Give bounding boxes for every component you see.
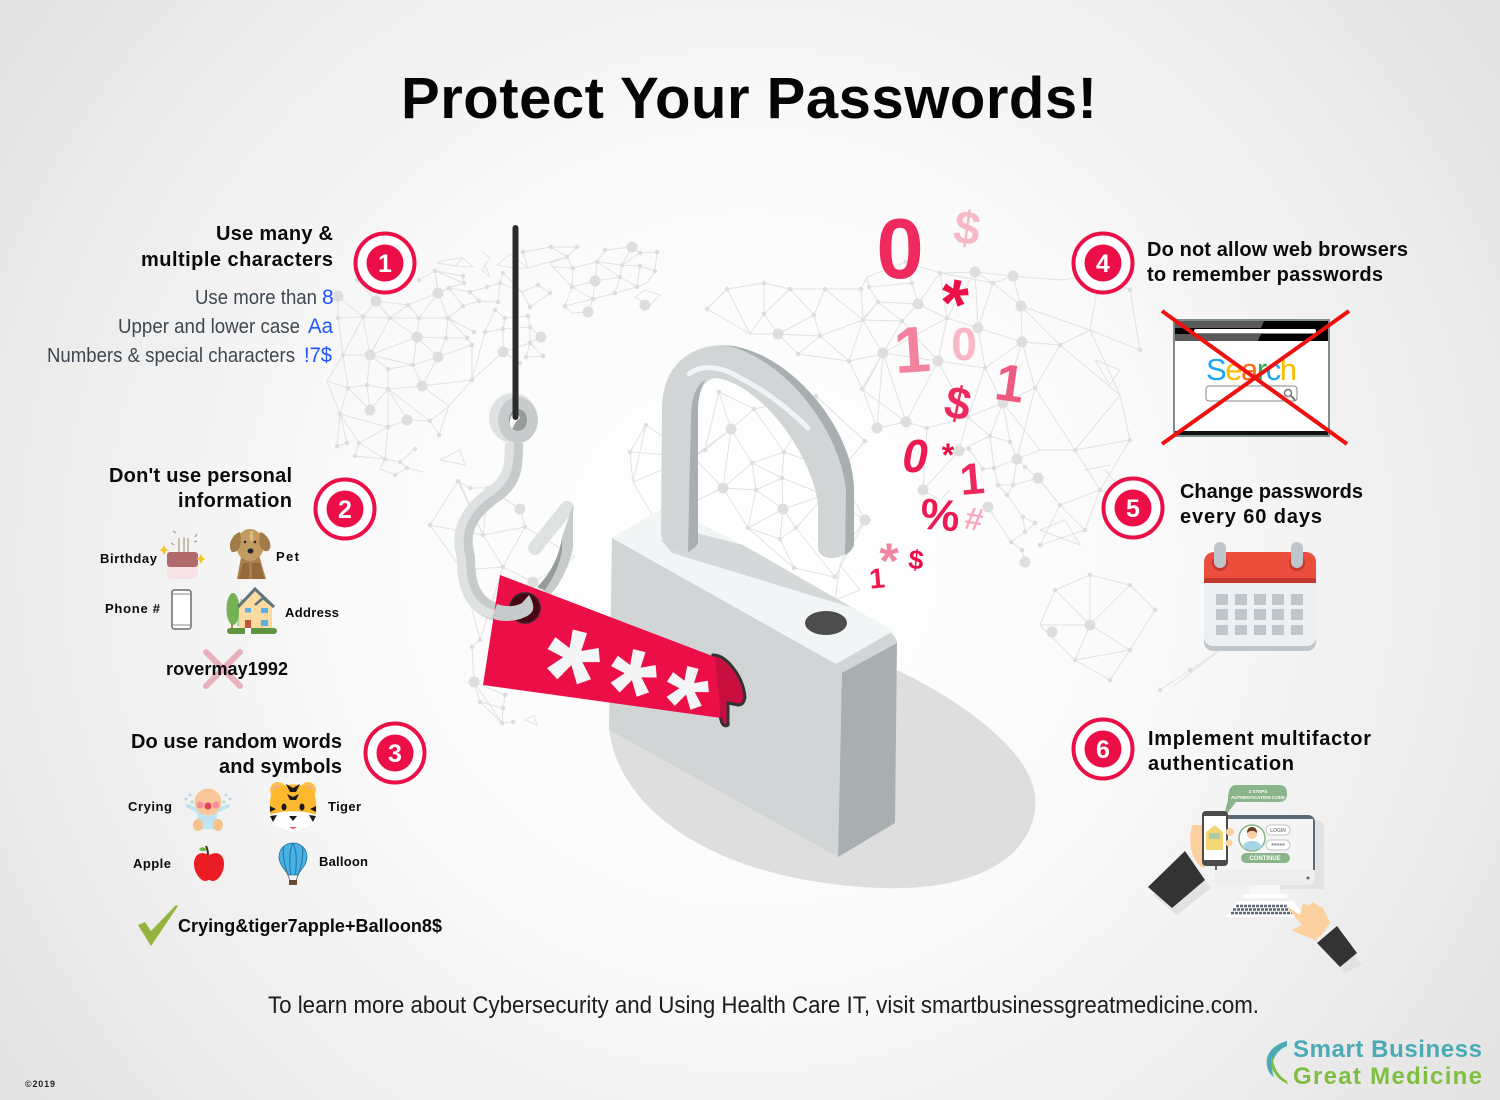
badge 4: [1074, 234, 1132, 292]
badge 6: 6: [1096, 736, 1110, 764]
left hand with phone: [1148, 811, 1234, 908]
badge 4: 4: [1096, 250, 1110, 278]
tip 5 heading: [1180, 481, 1363, 528]
tip 1 details: Upper and lower case: [118, 316, 300, 338]
label pet: Pet: [276, 549, 300, 564]
avatar: [1239, 825, 1265, 851]
icon: calendar: [1204, 542, 1316, 651]
icon: tiger: [270, 782, 316, 833]
panel: tip 4 browsers: [1074, 234, 1408, 444]
padlock: [609, 345, 897, 857]
floating password characters: 1: [891, 312, 933, 387]
label apple: Apple: [133, 856, 171, 871]
login fields: *****: [1271, 843, 1285, 850]
strong password with check mark: [138, 905, 442, 946]
padlock bevel: [836, 633, 897, 673]
label crying: Crying: [128, 799, 172, 814]
panel: tip 3 random words: [128, 724, 442, 946]
tip 3 heading: [131, 731, 342, 778]
tip 2 heading: [109, 465, 292, 512]
floating password characters: 1: [992, 353, 1028, 415]
login fields: LOGIN: [1270, 828, 1286, 834]
floating password characters: 1: [868, 562, 886, 595]
padlock right face: [838, 642, 897, 857]
floating password characters: [868, 199, 1028, 595]
floating password characters: 0: [951, 318, 977, 370]
panel: tip 5 change passwords: [1104, 478, 1363, 651]
tip 5 heading: every 60 days: [1180, 506, 1322, 528]
icon: phone: [172, 590, 191, 629]
world network map: [327, 247, 1220, 725]
padlock top face: [612, 512, 896, 670]
password asterisks: *: [589, 620, 669, 763]
chat bubble: 2 STEPS: [1249, 789, 1267, 794]
tip 3 heading: and symbols: [219, 756, 342, 778]
illustration: multifactor login: [1148, 785, 1362, 973]
tip 1 heading: [141, 223, 333, 271]
label phone: Phone #: [105, 601, 161, 616]
title: Protect Your Passwords!: [401, 66, 1097, 131]
floating password characters: #: [962, 500, 986, 538]
panel: tip 2 personal information: [100, 465, 374, 686]
logo: [1267, 1036, 1482, 1090]
password asterisks: [523, 595, 720, 771]
label birthday: Birthday: [100, 551, 158, 566]
tip 4 heading: [1147, 239, 1408, 286]
badge 1: 1: [378, 250, 392, 278]
icon: cake: [159, 531, 206, 579]
tip 1 heading: multiple characters: [141, 249, 333, 271]
padlock shadow: [609, 670, 1035, 888]
tip 1 heading: Use many &: [216, 223, 333, 245]
floating password characters: *: [931, 263, 975, 345]
floating password characters: $: [940, 375, 976, 431]
tip 1 details: Aa: [308, 315, 333, 338]
tip 6 heading: [1148, 728, 1371, 775]
tip 2 heading: Don't use personal: [109, 465, 292, 487]
icon: hot air balloon: [279, 843, 307, 885]
tip 1 details: Numbers & special characters: [47, 345, 295, 367]
tag fold: [713, 655, 745, 726]
weak password crossed out: rovermay1992: [166, 659, 288, 679]
badge 3: 3: [388, 740, 402, 768]
browser crossed out: Search: [1206, 352, 1297, 387]
strong password with check mark: Crying&tiger7apple+Balloon8$: [178, 916, 442, 936]
tip 6 heading: Implement multifactor: [1148, 728, 1371, 750]
tip 4 heading: to remember passwords: [1147, 264, 1383, 286]
tip 1 details: 8: [322, 286, 334, 309]
tip 1 details: Use more than: [195, 287, 317, 309]
tip 2 heading: information: [178, 490, 292, 512]
right hand on keyboard: [1285, 902, 1357, 967]
badge 1: [356, 234, 414, 292]
shadows: [1153, 820, 1362, 973]
weak password crossed out: [166, 652, 288, 686]
panel: tip 6 multifactor: [1074, 720, 1371, 973]
badge 2: 2: [338, 496, 352, 524]
floating password characters: $: [950, 199, 984, 256]
tip 3 heading: Do use random words: [131, 731, 342, 753]
keyhole: [805, 611, 847, 635]
icon: dog: [230, 529, 270, 579]
icon: house: [226, 589, 277, 634]
badge 2: [316, 480, 374, 538]
icon: apple: [194, 846, 224, 881]
logo: Smart Business: [1293, 1036, 1482, 1063]
login fields: CONTINUE: [1249, 856, 1281, 862]
chat bubble: [1223, 785, 1287, 819]
tip 6 heading: authentication: [1148, 753, 1294, 775]
fishing hook front part: [492, 595, 533, 621]
browser crossed out: [1162, 311, 1349, 444]
copyright: ©2019: [25, 1079, 55, 1089]
tip 4 heading: Do not allow web browsers: [1147, 239, 1408, 261]
floating password characters: 0: [902, 430, 928, 482]
label tiger: Tiger: [328, 799, 361, 814]
floating password characters: 0: [876, 202, 924, 297]
floating password characters: %: [919, 490, 961, 541]
badge 5: 5: [1126, 495, 1140, 523]
tip 1 details: !7$: [304, 344, 332, 367]
floating password characters: *: [942, 437, 955, 473]
floating password characters: 1: [958, 454, 986, 505]
badge 6: [1074, 720, 1132, 778]
padlock top face shadow wedge: [661, 533, 853, 608]
shackle: [661, 345, 854, 558]
password asterisks: *: [523, 595, 614, 761]
badge 3: [366, 724, 424, 782]
chat bubble: AUTHENTICATION CODE: [1231, 795, 1285, 800]
login fields: [1241, 825, 1290, 863]
footer text: To learn more about Cybersecurity and Using Health Care IT, visit smartbusinessgreatmedicine.com.: [268, 992, 1259, 1019]
password asterisks: *: [647, 639, 720, 771]
tag hole: [510, 593, 540, 623]
label balloon: Balloon: [319, 854, 368, 869]
tip 5 heading: Change passwords: [1180, 481, 1363, 503]
floating password characters: $: [907, 544, 925, 576]
tip 1 details: [47, 286, 334, 367]
floating password characters: *: [879, 533, 899, 589]
badge 5: [1104, 478, 1162, 538]
padlock front face: [609, 538, 842, 857]
logo: Great Medicine: [1293, 1063, 1482, 1090]
hook line: [512, 228, 518, 417]
red password tag: [483, 575, 745, 771]
label address: Address: [285, 605, 339, 620]
fishing hook back part: [459, 393, 573, 614]
panel: tip 1 many characters: [47, 223, 414, 367]
icon: crying baby: [186, 788, 230, 831]
